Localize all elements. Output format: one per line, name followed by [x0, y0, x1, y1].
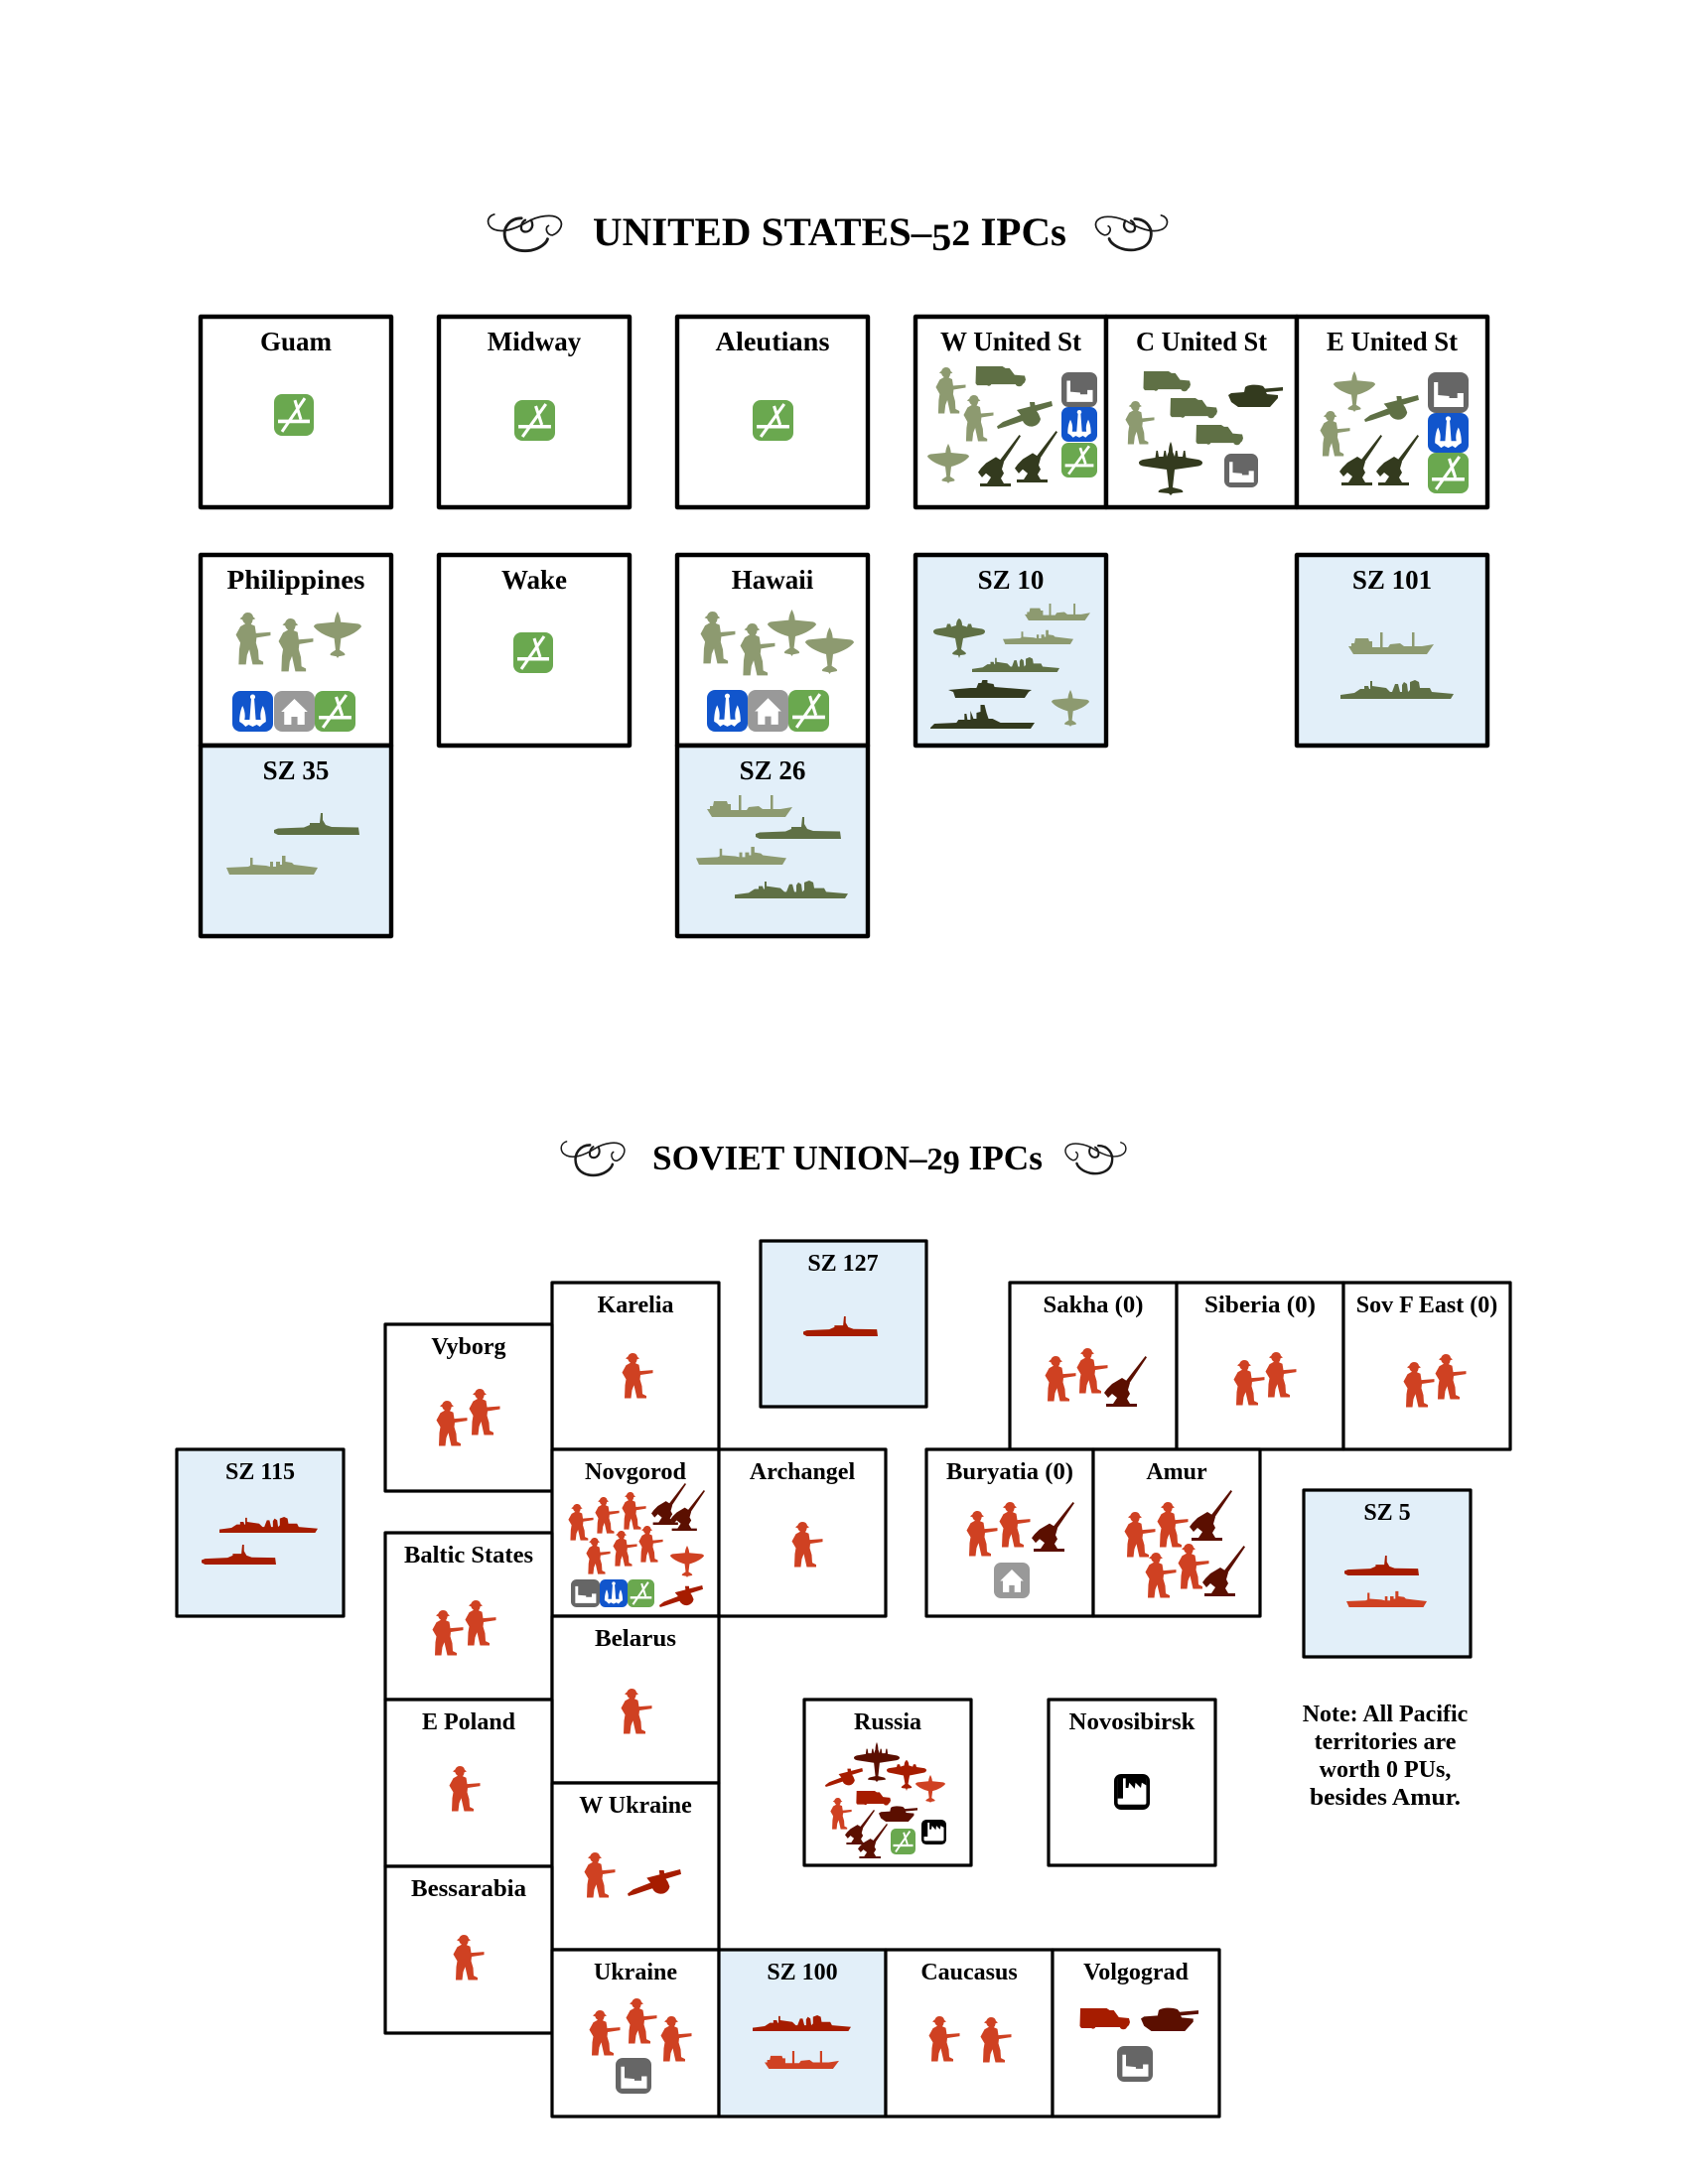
- label: Volgograd: Volgograd: [1083, 1960, 1190, 1985]
- panel: C United St: [1106, 317, 1297, 507]
- panel: SZ 101: [1297, 555, 1487, 746]
- label: Caucasus: Caucasus: [920, 1960, 1018, 1985]
- icon: capital factory: [1114, 1774, 1150, 1810]
- unit: infantry: [999, 1502, 1031, 1548]
- unit: anti-aircraft gun: [1202, 1546, 1245, 1596]
- unit: infantry: [586, 1538, 611, 1574]
- note: Pacific territories: [1303, 1702, 1469, 1811]
- label: Novgorod: Novgorod: [585, 1459, 687, 1485]
- unit: anti-aircraft gun: [670, 1490, 705, 1531]
- heading: United States: UNITED STATES–: [593, 209, 923, 254]
- icon: naval base: [1061, 407, 1097, 442]
- unit: transport: [1348, 632, 1434, 654]
- unit: infantry: [981, 2017, 1011, 2063]
- panel: Buryatia (0): [926, 1449, 1093, 1616]
- unit: infantry: [1076, 1348, 1108, 1394]
- label: Novosibirsk: Novosibirsk: [1068, 1709, 1196, 1735]
- unit: infantry: [465, 1600, 496, 1646]
- unit: cruiser: [735, 881, 848, 898]
- label: Guam: Guam: [260, 327, 333, 356]
- icon: factory: [1428, 372, 1469, 413]
- panel: W United St: [915, 317, 1106, 507]
- unit: cruiser: [753, 2015, 851, 2031]
- unit: infantry: [469, 1389, 500, 1435]
- panel: SZ 100: [719, 1950, 886, 2116]
- unit: infantry: [741, 623, 774, 675]
- ornament: right flourish: [1096, 215, 1168, 250]
- unit: anti-aircraft gun: [978, 435, 1021, 486]
- label: SZ 115: SZ 115: [225, 1459, 295, 1485]
- label: Sov F East (0): Sov F East (0): [1356, 1293, 1497, 1318]
- icon: naval base: [232, 691, 273, 732]
- label: Baltic States: Baltic States: [404, 1543, 533, 1569]
- panel: Volgograd: [1053, 1950, 1219, 2116]
- unit: artillery: [628, 1869, 681, 1896]
- icon: airfield: [274, 394, 314, 436]
- label: Midway: Midway: [488, 327, 582, 356]
- unit: artillery: [825, 1768, 863, 1787]
- unit: infantry: [433, 1610, 463, 1656]
- unit: infantry: [1146, 1553, 1176, 1598]
- unit: tank: [1228, 385, 1283, 407]
- unit: fighter: [915, 1775, 945, 1803]
- panel: E Poland: [385, 1700, 552, 1866]
- unit: transport: [1025, 604, 1090, 620]
- unit: infantry: [1045, 1356, 1076, 1402]
- panel: E United St: [1297, 317, 1487, 507]
- unit: cruiser: [1340, 680, 1454, 699]
- panel: SZ 10: [915, 555, 1106, 746]
- unit: infantry: [1265, 1352, 1297, 1398]
- label: SZ 5: SZ 5: [1363, 1500, 1411, 1526]
- unit: infantry: [622, 1689, 651, 1734]
- label: W United St: W United St: [940, 327, 1081, 356]
- note: Pacific territories: Note: All Pacific: [1303, 1702, 1469, 1727]
- icon: factory: [571, 1579, 600, 1607]
- unit: destroyer: [1346, 1591, 1427, 1607]
- unit: infantry: [1233, 1360, 1265, 1406]
- icon: airfield: [514, 400, 555, 441]
- ornament: left flourish: [489, 214, 561, 251]
- unit: tank: [1141, 2008, 1198, 2031]
- unit: artillery: [1364, 395, 1419, 422]
- panel: Vyborg: [385, 1324, 552, 1491]
- icon: factory: [616, 2058, 651, 2094]
- unit: infantry: [638, 1526, 663, 1563]
- unit: destroyer: [696, 847, 786, 865]
- title: Soviet Union section: [561, 1139, 1126, 1181]
- unit: fighter: [1334, 371, 1375, 412]
- unit: infantry: [622, 1353, 653, 1399]
- label: Philippines: Philippines: [226, 565, 365, 595]
- panel: Karelia: [552, 1283, 719, 1449]
- unit: transport: [707, 795, 792, 817]
- icon: airfield: [753, 400, 793, 441]
- panel: Hawaii: [677, 555, 868, 746]
- panel: Philippines: [201, 555, 391, 746]
- icon: airfield: [628, 1579, 654, 1607]
- panel: SZ 35: [201, 746, 391, 936]
- label: W Ukraine: W Ukraine: [579, 1793, 692, 1819]
- unit: anti-aircraft gun: [1015, 431, 1057, 482]
- label: Karelia: Karelia: [598, 1293, 673, 1318]
- unit: anti-aircraft gun: [1376, 435, 1419, 485]
- unit: truck: [1196, 425, 1243, 445]
- unit: fighter: [927, 444, 969, 483]
- label: SZ 100: SZ 100: [767, 1960, 838, 1985]
- unit: infantry: [1124, 1512, 1156, 1558]
- unit: fighter: [314, 612, 361, 658]
- unit: transport: [765, 2051, 839, 2069]
- unit: infantry: [967, 1511, 997, 1557]
- icon: airfield: [1428, 453, 1469, 493]
- icon: factory: [1061, 372, 1097, 407]
- unit: infantry: [1320, 411, 1350, 457]
- label: Amur: Amur: [1146, 1459, 1207, 1485]
- label: Belarus: Belarus: [595, 1626, 676, 1652]
- unit: cruiser: [219, 1517, 318, 1533]
- unit: infantry: [1404, 1362, 1434, 1408]
- icon: airfield: [788, 690, 829, 732]
- heading: United States: 2: [951, 213, 970, 254]
- unit: truck: [856, 1791, 891, 1805]
- unit: infantry: [595, 1497, 620, 1534]
- ornament: right flourish: [1065, 1143, 1126, 1173]
- panel: Wake: [439, 555, 630, 746]
- panel: Caucasus: [886, 1950, 1053, 2116]
- unit: truck: [1170, 398, 1217, 418]
- unit: infantry: [590, 2010, 620, 2056]
- unit: infantry: [584, 1852, 616, 1898]
- unit: infantry: [1178, 1544, 1209, 1589]
- unit: fighter: [768, 610, 816, 656]
- unit: infantry: [568, 1504, 594, 1541]
- label: Vyborg: Vyborg: [431, 1334, 506, 1360]
- label: Bessarabia: Bessarabia: [411, 1876, 526, 1902]
- label: E United St: E United St: [1327, 327, 1458, 356]
- unit: infantry: [449, 1766, 481, 1812]
- unit: infantry: [830, 1798, 852, 1830]
- unit: infantry: [963, 395, 994, 441]
- unit: anti-aircraft gun: [651, 1483, 686, 1525]
- icon: airfield: [1061, 443, 1097, 478]
- icon: airfield: [891, 1829, 915, 1854]
- label: SZ 127: SZ 127: [807, 1251, 879, 1277]
- note: Pacific territories: territories are: [1315, 1729, 1457, 1755]
- unit: anti-aircraft gun: [1190, 1490, 1232, 1541]
- panel: Novgorod: [552, 1449, 719, 1616]
- unit: carrier: [948, 680, 1032, 698]
- unit: submarine: [756, 817, 841, 839]
- label: Buryatia (0): Buryatia (0): [946, 1459, 1073, 1485]
- panel: Belarus: [552, 1616, 719, 1783]
- unit: anti-aircraft gun: [1032, 1502, 1074, 1552]
- unit: infantry: [626, 1998, 657, 2044]
- label: Hawaii: Hawaii: [732, 565, 814, 595]
- unit: bomber: [887, 1760, 926, 1791]
- unit: infantry: [792, 1522, 822, 1568]
- note: Pacific territories: worth 0 PUs,: [1320, 1757, 1451, 1783]
- unit: artillery: [659, 1585, 703, 1607]
- heading: United States: 5: [931, 216, 951, 259]
- unit: submarine: [202, 1545, 276, 1565]
- label: SZ 10: SZ 10: [978, 565, 1044, 595]
- unit: submarine: [1344, 1556, 1419, 1575]
- unit: artillery: [997, 401, 1053, 429]
- icon: minor factory: [274, 691, 315, 732]
- label: Aleutians: Aleutians: [715, 327, 830, 356]
- icon: naval base: [1428, 413, 1469, 453]
- unit: destroyer: [226, 856, 318, 875]
- panel: Amur: [1093, 1449, 1260, 1616]
- unit: infantry: [1436, 1354, 1466, 1400]
- panel: Archangel: [719, 1449, 886, 1616]
- panel: Sakha (0): [1010, 1283, 1177, 1449]
- panel: Sov F East (0): [1343, 1283, 1510, 1449]
- unit: battleship: [930, 705, 1035, 729]
- label: Siberia (0): Siberia (0): [1204, 1293, 1316, 1318]
- unit: fighter: [670, 1546, 704, 1577]
- unit: infantry: [453, 1935, 485, 1980]
- icon: minor factory: [994, 1563, 1030, 1598]
- icon: naval base: [600, 1579, 628, 1607]
- panel: W Ukraine: [552, 1783, 719, 1950]
- unit: destroyer: [1003, 630, 1073, 644]
- panel: Guam: [201, 317, 391, 507]
- panel: Russia: [804, 1700, 971, 1865]
- unit: infantry: [279, 618, 313, 671]
- unit: submarine: [274, 813, 359, 835]
- unit: infantry: [701, 612, 735, 663]
- unit: infantry: [1125, 401, 1155, 445]
- unit: truck: [976, 366, 1026, 386]
- icon: factory: [1224, 454, 1258, 487]
- unit: submarine: [803, 1316, 878, 1336]
- icon: factory: [1117, 2046, 1153, 2082]
- unit: infantry: [236, 613, 270, 664]
- unit: cruiser: [972, 657, 1059, 672]
- panel: Novosibirsk: [1049, 1700, 1215, 1865]
- panel: Midway: [439, 317, 630, 507]
- unit: infantry: [622, 1492, 646, 1530]
- label: SZ 26: SZ 26: [740, 755, 805, 785]
- ornament: left flourish: [561, 1142, 625, 1175]
- unit: infantry: [1158, 1502, 1188, 1548]
- unit: infantry: [929, 2016, 959, 2062]
- label: Wake: Wake: [501, 565, 567, 595]
- heading: Soviet Union: SOVIET UNION–2: [652, 1139, 943, 1177]
- icon: airfield: [513, 632, 553, 673]
- panel: Baltic States: [385, 1533, 552, 1700]
- label: Ukraine: Ukraine: [594, 1960, 677, 1985]
- unit: tank: [879, 1806, 917, 1822]
- unit: bomber: [933, 618, 985, 658]
- note: Pacific territories: besides Amur.: [1310, 1785, 1461, 1811]
- panel: SZ 127: [761, 1241, 926, 1407]
- label: Russia: Russia: [854, 1709, 921, 1735]
- unit: truck: [1080, 2008, 1130, 2029]
- heading: United States: IPCs: [980, 209, 1064, 254]
- unit: fighter: [1052, 690, 1089, 727]
- unit: infantry: [935, 367, 966, 413]
- unit: truck: [1143, 371, 1191, 391]
- icon: airfield: [315, 691, 355, 732]
- label: Sakha (0): Sakha (0): [1043, 1293, 1144, 1318]
- label: C United St: C United St: [1136, 327, 1267, 356]
- heading: Soviet Union: IPCs: [960, 1139, 1043, 1177]
- icon: capital factory: [921, 1820, 946, 1844]
- label: SZ 101: SZ 101: [1352, 565, 1432, 595]
- unit: heavy bomber: [1139, 442, 1202, 495]
- panel: Siberia (0): [1177, 1283, 1343, 1449]
- unit: anti-aircraft gun: [858, 1824, 888, 1858]
- label: E Poland: E Poland: [422, 1709, 516, 1735]
- panel: SZ 26: [677, 746, 868, 936]
- unit: infantry: [613, 1531, 637, 1567]
- panel: Aleutians: [677, 317, 868, 507]
- heading: Soviet Union: 9: [943, 1145, 960, 1181]
- label: SZ 35: SZ 35: [263, 755, 329, 785]
- unit: anti-aircraft gun: [1104, 1356, 1147, 1407]
- panel: SZ 5: [1304, 1490, 1471, 1657]
- unit: anti-aircraft gun: [1339, 435, 1382, 485]
- icon: minor factory: [748, 690, 788, 732]
- panel: Bessarabia: [385, 1866, 552, 2033]
- panel: SZ 115: [177, 1449, 344, 1616]
- unit: fighter: [805, 627, 854, 674]
- icon: naval base: [707, 690, 748, 732]
- unit: infantry: [437, 1401, 467, 1446]
- title: United States section: [489, 209, 1168, 259]
- label: Archangel: Archangel: [750, 1459, 855, 1485]
- panel: Ukraine: [552, 1950, 719, 2116]
- unit: infantry: [661, 2016, 691, 2062]
- unit: heavy bomber: [854, 1742, 900, 1782]
- unit: anti-aircraft gun: [845, 1810, 875, 1844]
